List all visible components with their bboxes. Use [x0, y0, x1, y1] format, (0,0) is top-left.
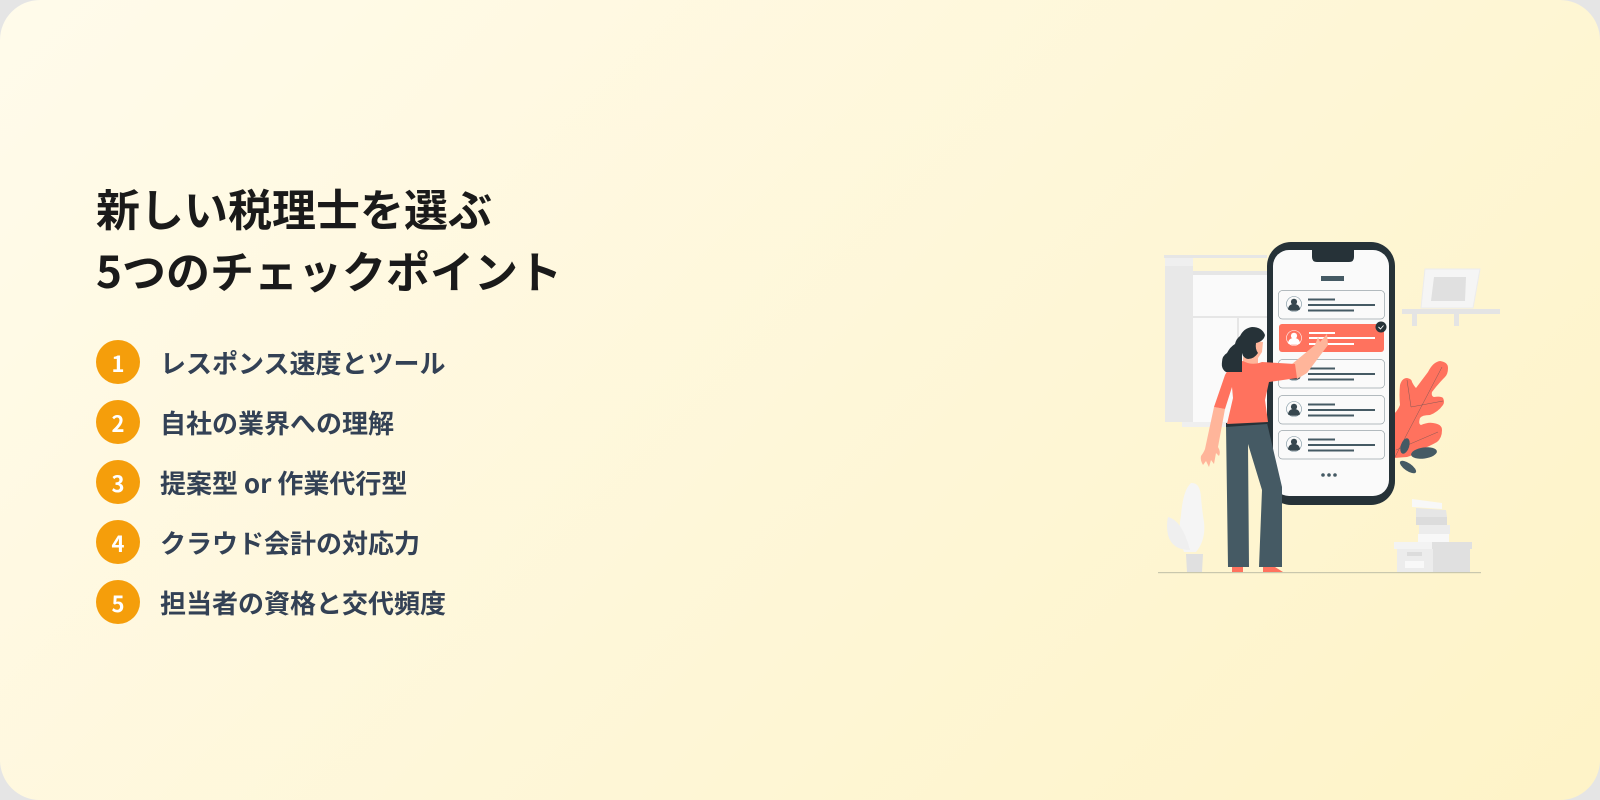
window and curtain [1164, 255, 1267, 427]
item 4: 4 [112, 527, 124, 559]
phone [1267, 242, 1395, 505]
neck and face [1243, 340, 1263, 364]
item 5 [96, 580, 446, 624]
item 5: 5 [112, 587, 124, 619]
item 1: 1 [112, 347, 124, 379]
item 4: クラウド会計の対応力 [160, 524, 420, 561]
item 4 [96, 520, 420, 564]
item 5: 担当者の資格と交代頻度 [160, 584, 446, 621]
back arm [1201, 407, 1225, 467]
trousers [1226, 423, 1282, 567]
item 2: 2 [112, 407, 124, 439]
title: 新しい税理士を選ぶ [96, 175, 492, 239]
checklist [96, 340, 446, 624]
item 1 [96, 340, 445, 384]
shelf with picture frame [1402, 269, 1500, 326]
raised arm [1292, 334, 1328, 379]
title: 5つのチェックポイント [96, 237, 562, 301]
item 3: 3 [112, 467, 124, 499]
ground line [1158, 572, 1481, 573]
item 3: 提案型 or 作業代行型 [160, 464, 407, 501]
potted plant [1167, 483, 1204, 572]
contact card 4 [1278, 396, 1384, 424]
item 2 [96, 400, 394, 444]
item 3 [96, 460, 407, 504]
shoes [1232, 567, 1283, 572]
item 1: レスポンス速度とツール [160, 344, 445, 381]
title [96, 175, 562, 301]
item 2: 自社の業界への理解 [160, 404, 394, 441]
contact card 1 [1278, 290, 1384, 319]
contact card 3 [1278, 360, 1384, 388]
shirt [1214, 361, 1297, 424]
woman [1201, 327, 1328, 572]
boxes and books [1394, 499, 1472, 572]
contact card selected [1279, 322, 1386, 352]
plant leaf [1394, 361, 1448, 476]
hair [1222, 327, 1265, 372]
contact card 5 [1278, 430, 1384, 459]
more dots [1321, 473, 1337, 477]
